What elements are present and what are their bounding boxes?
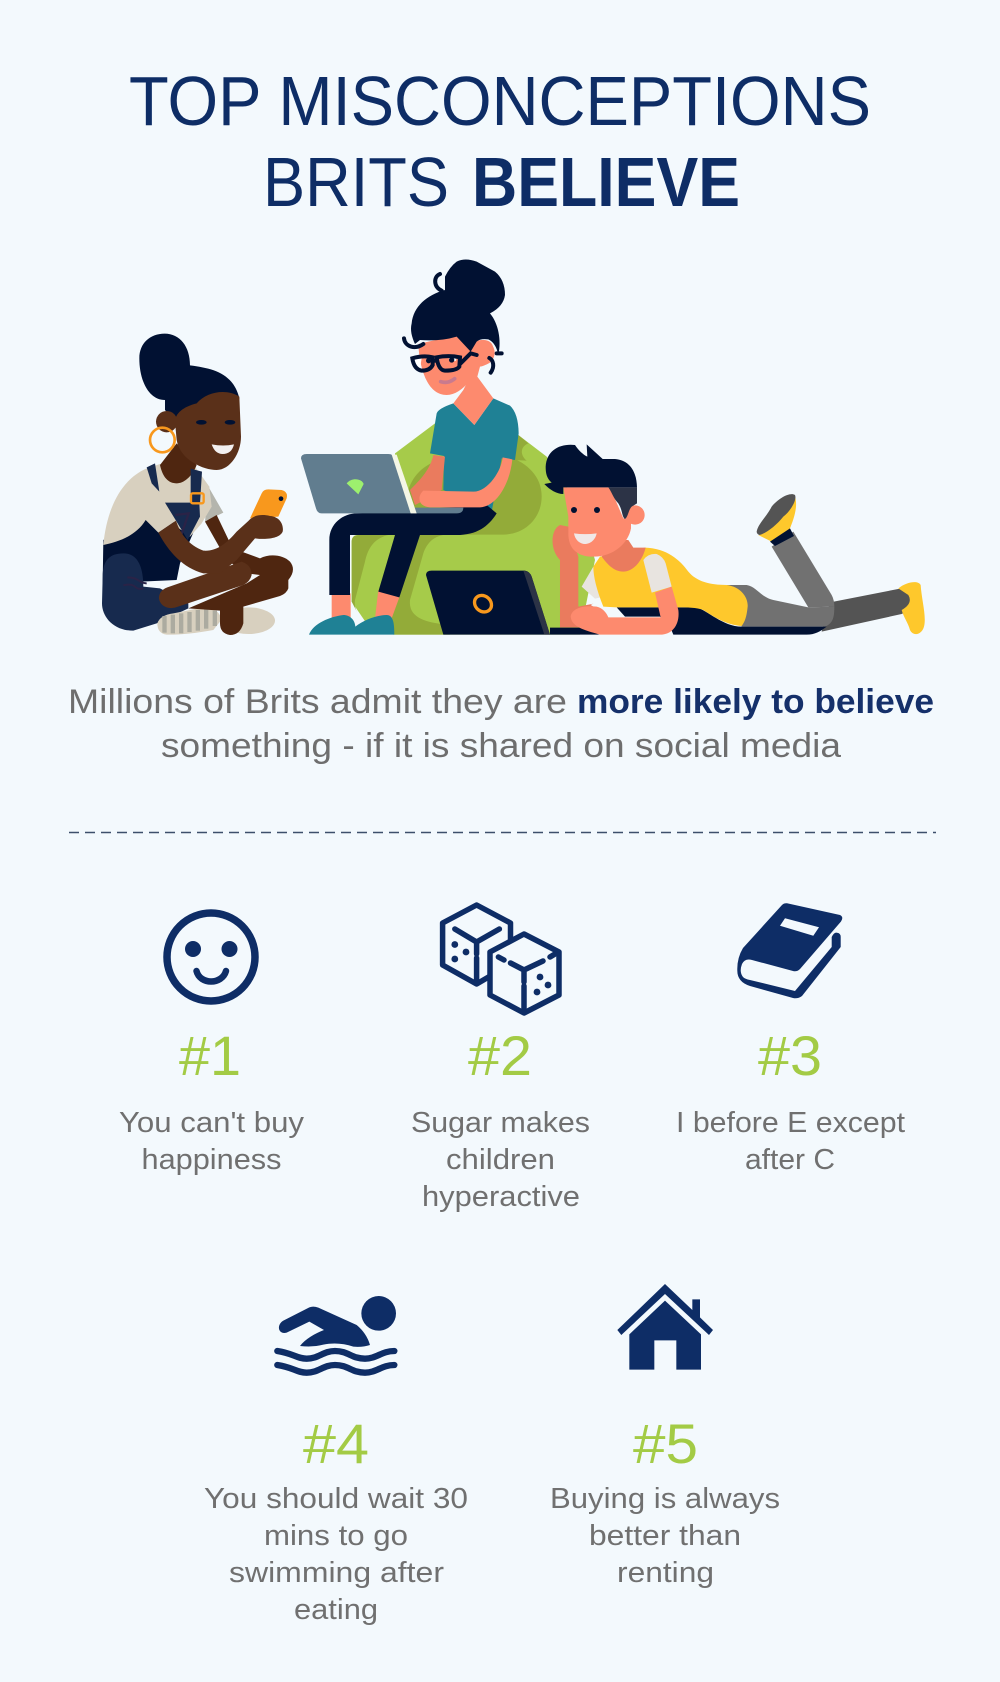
item 1: can't buy happiness: #1 — [179, 1024, 241, 1087]
person: woman sitting cross-legged with phone — [102, 334, 293, 635]
icon: sugar cubes — [443, 905, 559, 1013]
icon: book — [737, 903, 842, 998]
subtitle text: something - if it is shared on social media — [161, 727, 841, 765]
item 4: wait 30 mins to go swimming: swimming after — [229, 1557, 444, 1589]
subtitle text — [68, 683, 934, 765]
title — [129, 62, 871, 221]
item 3: I before E except after C: I before E except — [676, 1107, 905, 1139]
item 3: I before E except after C: after C — [745, 1144, 835, 1176]
item 5: buying is better than renting: #5 — [633, 1412, 698, 1475]
item 4: wait 30 mins to go swimming: #4 — [303, 1412, 369, 1475]
title: BRITS — [263, 143, 449, 221]
icon: swimmer — [277, 1296, 396, 1373]
icon: house — [617, 1284, 713, 1370]
subtitle text: more likely to believe — [577, 683, 934, 721]
person: woman with laptop on beanbag — [301, 260, 519, 635]
laptop: black with orange logo — [426, 571, 550, 635]
item 5: buying is better than renting: Buying is always — [550, 1483, 780, 1515]
item 5: buying is better than renting: better than — [589, 1520, 741, 1552]
item 4: wait 30 mins to go swimming: eating — [294, 1594, 378, 1626]
item 2: sugar makes children hyperactive: hyperactive — [422, 1181, 580, 1213]
item 5: buying is better than renting — [550, 1284, 780, 1589]
item 1: can't buy happiness: happiness — [142, 1144, 282, 1176]
item 3: I before E except after C: #3 — [758, 1024, 822, 1087]
item 2: sugar makes children hyperactive: Sugar makes — [411, 1107, 590, 1139]
item 1: can't buy happiness: You can't buy — [119, 1107, 305, 1139]
subtitle text: Millions of Brits admit they are — [68, 683, 567, 721]
title: BELIEVE — [472, 143, 740, 221]
illustration: three people using devices — [102, 260, 925, 635]
item 4: wait 30 mins to go swimming: mins to go — [264, 1520, 408, 1552]
beanbag chair — [352, 423, 595, 635]
item 2: sugar makes children hyperactive: #2 — [468, 1024, 532, 1087]
item 2: sugar makes children hyperactive — [411, 905, 590, 1213]
item 4: wait 30 mins to go swimming: You should wait 30 — [204, 1483, 468, 1515]
person: man lying on stomach — [544, 444, 925, 635]
item 1: can't buy happiness — [119, 913, 305, 1176]
laptop: grey with green logo — [301, 454, 463, 513]
item 2: sugar makes children hyperactive: children — [446, 1144, 555, 1176]
item 4: wait 30 mins to go swimming — [204, 1296, 468, 1626]
item 3: I before E except after C — [676, 903, 905, 1176]
title: TOP MISCONCEPTIONS — [129, 62, 871, 140]
icon: smiley face — [167, 913, 255, 1001]
item 5: buying is better than renting: renting — [617, 1557, 714, 1589]
